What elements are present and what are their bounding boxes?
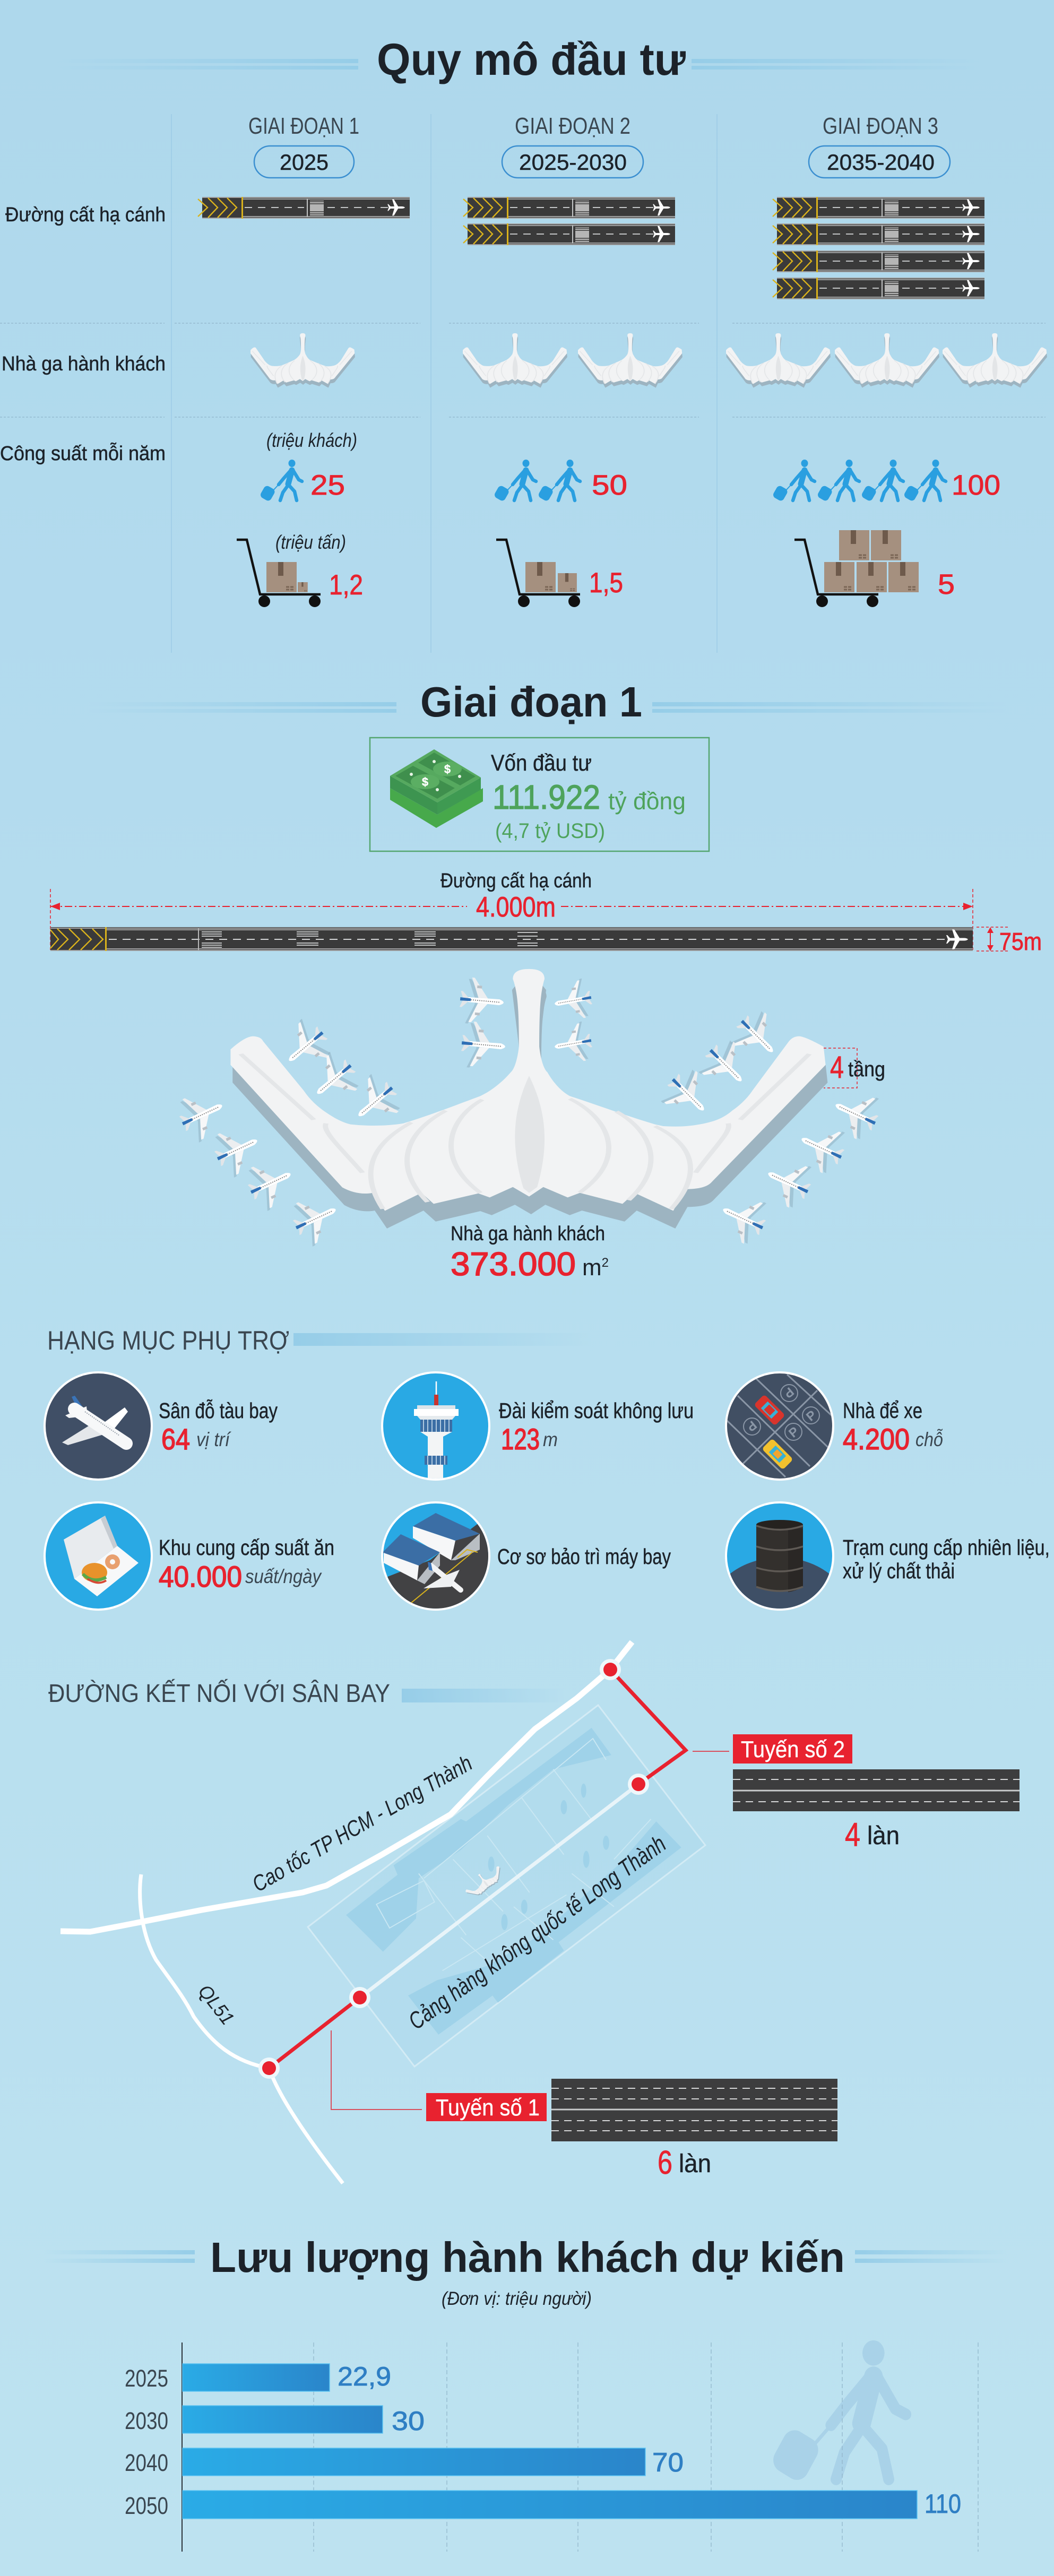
cargo: phase 1: 1,2 xyxy=(329,569,363,601)
airport site xyxy=(308,1705,705,2067)
bar 2040 xyxy=(125,2448,684,2477)
item: apron xyxy=(45,1372,278,1480)
unit: million passengers: (triệu khách) xyxy=(266,429,357,451)
road: internal xyxy=(360,1784,638,1998)
aircraft right inner xyxy=(656,1005,789,1127)
text: catering xyxy=(159,1535,334,1593)
cargo: phase 3 xyxy=(794,530,955,607)
aircraft at stem xyxy=(458,976,594,1070)
bar 2025: 2025 xyxy=(125,2365,168,2392)
bar 2050: 2050 xyxy=(125,2492,168,2519)
terminals: phase 2 xyxy=(463,333,682,388)
route 2 callout xyxy=(693,1734,1020,1853)
road: QL51 xyxy=(140,1874,343,2183)
heading: Quy mô đầu tư: Quy mô đầu tư xyxy=(377,34,686,84)
callout: 4 floors: 4 xyxy=(830,1050,844,1085)
bar 2030: 30 xyxy=(392,2406,425,2436)
map: airport and roads xyxy=(61,1642,705,2183)
icon: parking lot xyxy=(726,1372,833,1480)
bar 2030 xyxy=(125,2406,425,2436)
road label: QL51: QL51 xyxy=(194,1981,239,2029)
row label: capacity: Công suất mỗi năm xyxy=(0,442,166,465)
text: catering: suất/ngày xyxy=(245,1566,322,1587)
runway: phase 1 full length xyxy=(50,927,973,951)
label: terminal area: 373.000 xyxy=(451,1246,576,1283)
icon: food box xyxy=(45,1502,152,1610)
label: terminal area: 2 xyxy=(602,1256,609,1270)
passengers: phase 1 xyxy=(259,460,345,502)
runways: phase 1 xyxy=(198,197,410,219)
text: parking xyxy=(843,1398,943,1456)
bar 2040: 70 xyxy=(652,2448,684,2477)
label: terminal area: m xyxy=(582,1255,602,1281)
cargo: phase 1 xyxy=(237,540,363,607)
column header: phase 3: 2035-2040 xyxy=(827,150,935,175)
callout: 4 floors: tầng xyxy=(848,1058,885,1081)
dimension: 4000 m xyxy=(50,889,973,950)
text: fuel station xyxy=(843,1535,1050,1583)
terminals: phase 1 xyxy=(250,333,355,388)
road: 6 lanes xyxy=(551,2079,837,2141)
value: capital in VND: tỷ đồng xyxy=(608,788,686,815)
icon: parking lot: P xyxy=(804,1408,819,1424)
route 2 callout: Tuyến số 2 xyxy=(741,1736,845,1762)
text: control tower: m xyxy=(543,1429,558,1450)
text: fuel station: xử lý chất thải xyxy=(843,1559,955,1583)
passengers: phase 1: 25 xyxy=(310,470,345,501)
route 1 callout xyxy=(331,2030,837,2181)
bar 2050 xyxy=(125,2489,961,2519)
label: 6 lanes xyxy=(658,2145,711,2181)
column header: phase 2 xyxy=(502,113,643,178)
label: 4 lanes: 4 xyxy=(845,1817,860,1853)
dimension: 75 m xyxy=(977,927,1042,955)
bar chart: passenger forecast xyxy=(125,2340,978,2552)
heading: ancillary works xyxy=(47,1326,592,1355)
item: catering xyxy=(45,1502,334,1610)
text: apron: vị trí xyxy=(196,1429,231,1450)
road: 4 lanes xyxy=(733,1769,1020,1811)
label: 4 lanes: làn xyxy=(867,1822,900,1850)
text: maintenance: Cơ sơ bảo trì máy bay xyxy=(497,1544,671,1569)
dimension: 75 m: 75m xyxy=(999,928,1042,955)
cargo: phase 3: 5 xyxy=(938,569,955,600)
text: catering: 40.000 xyxy=(159,1560,242,1593)
icon: stack of money xyxy=(390,749,483,828)
heading: expected passenger traffic xyxy=(44,2234,1006,2281)
heading: Quy mô đầu tư xyxy=(48,34,989,84)
icon: stack of money: $ xyxy=(444,763,451,776)
runways: phase 2 xyxy=(463,197,675,245)
row label: terminal: Nhà ga hành khách xyxy=(2,353,166,375)
text: catering: Khu cung cấp suất ăn xyxy=(159,1535,334,1560)
column header: phase 2: GIAI ĐOẠN 2 xyxy=(515,113,630,139)
label: capital: Vốn đầu tư xyxy=(491,750,592,776)
runways: phase 3 xyxy=(773,197,984,299)
item: control tower xyxy=(382,1372,694,1483)
text: apron: Sân đỗ tàu bay xyxy=(159,1398,278,1423)
icon: parking lot: P xyxy=(786,1424,802,1441)
bar 2025 xyxy=(125,2362,391,2392)
label: airport: Cảng hàng không quốc tế Long Thành xyxy=(403,1830,671,2035)
panel: investment capital xyxy=(370,738,709,851)
text: control tower: Đài kiểm soát không lưu xyxy=(499,1398,694,1423)
label: 4 lanes xyxy=(845,1817,900,1853)
text: parking: 4.200 xyxy=(843,1422,910,1456)
unit: million tonnes: (triệu tấn) xyxy=(275,531,346,553)
dimension: 4000 m: 4.000m xyxy=(476,892,556,923)
icon: parking lot: P xyxy=(781,1384,797,1401)
callout: 4 floors xyxy=(824,1048,885,1088)
text: apron xyxy=(159,1398,278,1456)
value: capital in USD: (4,7 tỷ USD) xyxy=(495,819,605,843)
terminal building with aircraft xyxy=(173,969,885,1249)
passengers: phase 2 xyxy=(493,460,627,502)
label: terminal area: Nhà ga hành khách xyxy=(451,1223,605,1245)
heading: ancillary works: HẠNG MỤC PHỤ TRỢ xyxy=(47,1326,289,1355)
icon: stack of money: $ xyxy=(422,775,428,789)
column header: phase 1 xyxy=(248,113,359,178)
text: control tower: 123 xyxy=(501,1422,540,1456)
icon: oil drum xyxy=(725,1501,834,1611)
item: fuel station xyxy=(725,1501,1049,1611)
bar 2030: 2030 xyxy=(125,2407,168,2434)
icon: parking lot: P xyxy=(744,1417,759,1434)
panel: investment scale table xyxy=(0,113,1047,653)
terminal building xyxy=(230,969,827,1229)
aircraft right outer xyxy=(714,1083,885,1248)
icon: hangars xyxy=(382,1502,494,1613)
column header: phase 1: 2025 xyxy=(280,150,329,175)
aircraft left inner xyxy=(274,1014,407,1133)
route 1 callout: Tuyến số 1 xyxy=(436,2095,540,2121)
item: parking xyxy=(726,1372,943,1480)
column header: phase 3 xyxy=(809,113,950,178)
bar 2050: 110 xyxy=(925,2489,961,2519)
icon: control tower xyxy=(382,1372,489,1483)
cargo: phase 2 xyxy=(496,540,623,607)
passengers: phase 3: 100 xyxy=(952,470,1000,501)
passengers: phase 3 xyxy=(772,460,1000,502)
label: 6 lanes: 6 xyxy=(658,2145,672,2181)
label: 6 lanes: làn xyxy=(679,2150,711,2178)
text: control tower xyxy=(499,1398,694,1456)
column header: phase 2: 2025-2030 xyxy=(519,150,627,175)
chart unit note: (Đơn vị: triệu người) xyxy=(442,2288,592,2309)
label: runway length title: Đường cất hạ cánh xyxy=(440,870,592,892)
road label: expressway: Cao tốc TP HCM - Long Thành xyxy=(248,1750,477,1897)
text: apron: 64 xyxy=(161,1422,190,1456)
text: parking: chỗ xyxy=(915,1429,943,1450)
column header: phase 3: GIAI ĐOẠN 3 xyxy=(823,113,938,139)
value: capital in VND xyxy=(493,778,686,816)
road: expressway xyxy=(61,1642,632,1932)
item: maintenance xyxy=(382,1502,671,1613)
passengers: phase 2: 50 xyxy=(592,470,627,501)
value: capital in VND: 111.922 xyxy=(493,778,600,816)
column header: phase 1: GIAI ĐOẠN 1 xyxy=(248,113,359,139)
aircraft left outer xyxy=(173,1085,345,1249)
bar 2040: 2040 xyxy=(125,2449,168,2476)
route 2 red line xyxy=(610,1670,686,1784)
map junctions xyxy=(258,1659,649,2079)
label: terminal area xyxy=(451,1223,609,1283)
heading: expected passenger traffic: Lưu lượng hành khách dự kiến xyxy=(210,2234,845,2281)
heading: Giai đoạn 1 xyxy=(88,678,1008,725)
cargo: phase 2: 1,5 xyxy=(589,567,623,599)
route 1 red line xyxy=(269,1998,360,2068)
heading: road connections: ĐƯỜNG KẾT NỐI VỚI SÂN BAY xyxy=(48,1679,390,1708)
icon: aircraft on apron xyxy=(45,1372,152,1480)
bar 2025: 22,9 xyxy=(338,2362,391,2391)
ghost walker icon xyxy=(769,2340,906,2485)
text: parking: Nhà để xe xyxy=(843,1398,922,1423)
row label: runway: Đường cất hạ cánh xyxy=(5,204,166,226)
terminals: phase 3 xyxy=(726,333,1047,388)
heading: Giai đoạn 1: Giai đoạn 1 xyxy=(420,678,642,725)
